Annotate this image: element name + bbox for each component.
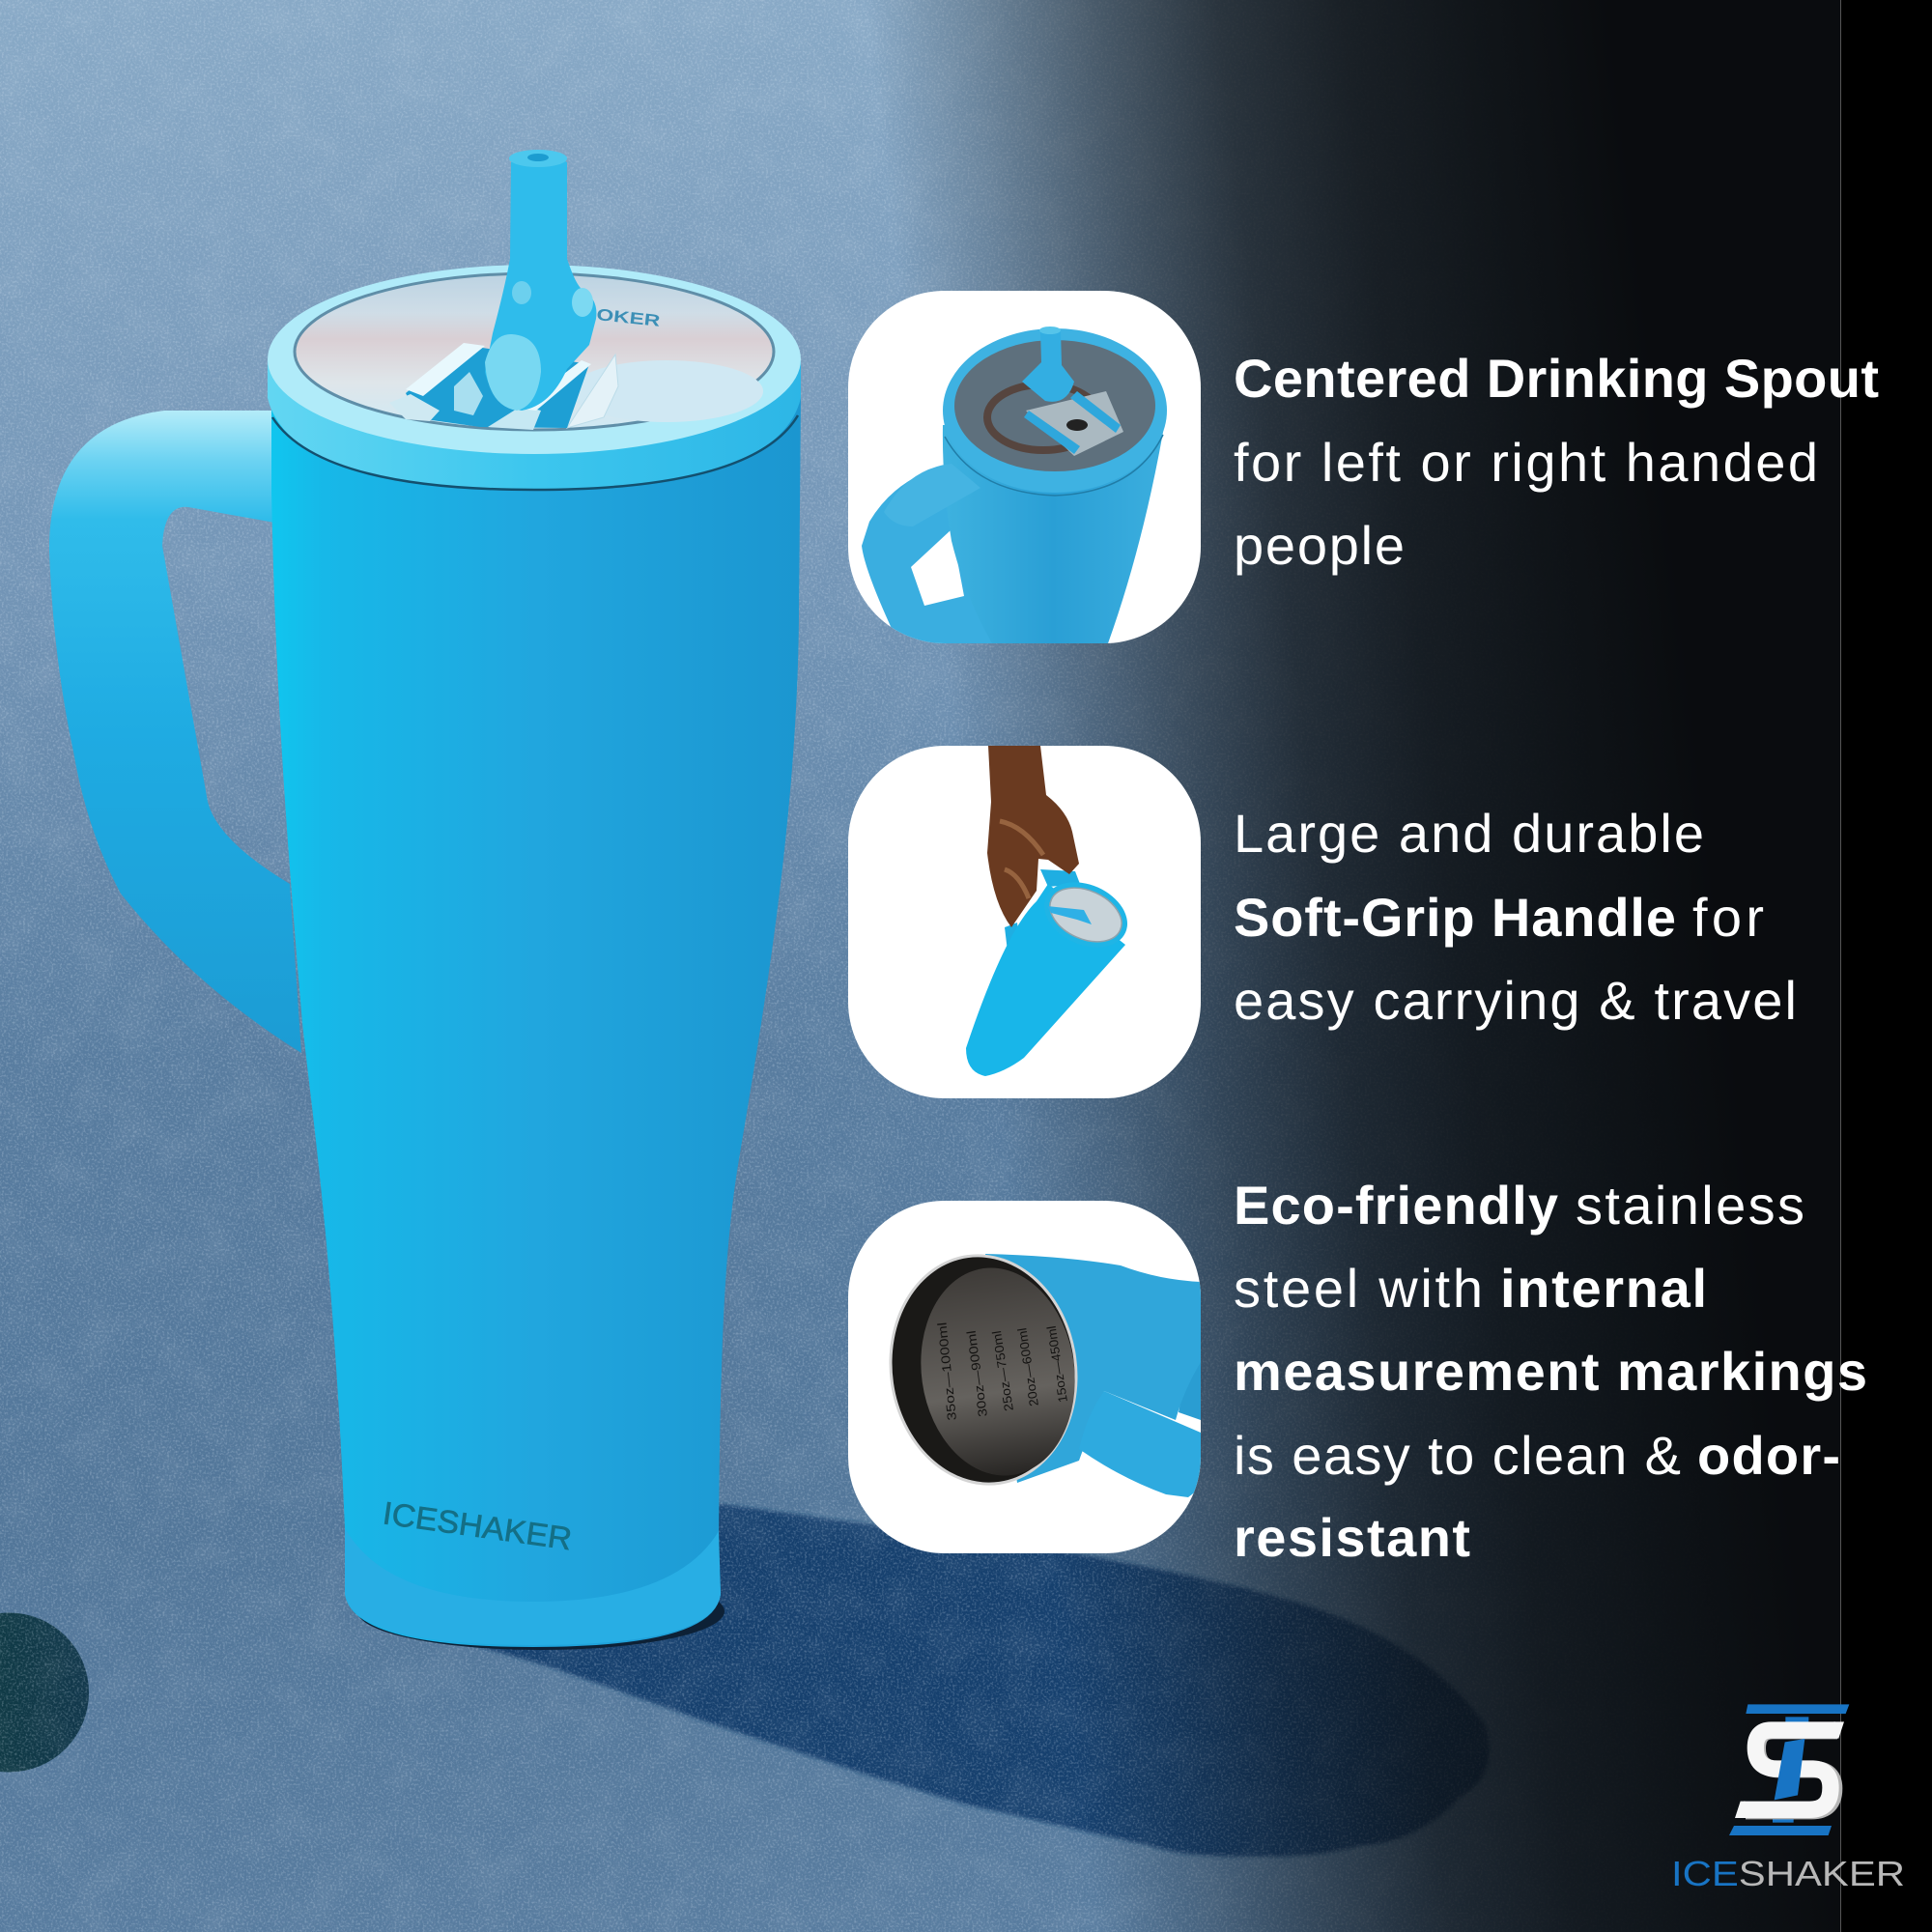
text block: soft-grip handle: easy carrying & travel: [1234, 970, 1797, 1031]
text block: eco-friendly steel: steel with: [1234, 1258, 1483, 1319]
contact shadow: [357, 1573, 724, 1650]
mug rim and lid: [943, 328, 1167, 493]
straw and clear vent: [389, 150, 618, 430]
base ring: [345, 1528, 721, 1645]
text block: eco-friendly steel: [1234, 1175, 1867, 1568]
logo mark: [1729, 1704, 1849, 1835]
logo wordmark: ICE SHAKER: [1671, 1854, 1905, 1893]
lid brand mark: OKER: [596, 305, 661, 330]
text block: eco-friendly steel: internal: [1500, 1258, 1707, 1319]
text block: eco-friendly steel: measurement markings: [1234, 1341, 1867, 1402]
cast shadow of tumbler: [464, 1504, 1490, 1857]
text block: soft-grip handle: [1234, 803, 1797, 1031]
tumbler body: [271, 396, 801, 1647]
text block: soft-grip handle: for: [1692, 887, 1764, 948]
handle: [49, 411, 301, 1053]
text block: centered drinking spout: [1234, 348, 1879, 576]
panel: stainless interior photo: [848, 1201, 1201, 1553]
measurement markings: [934, 1321, 1070, 1421]
panel: soft-grip handle photo: [848, 746, 1201, 1098]
far handle: [1179, 1357, 1201, 1420]
tilted tumbler: [966, 884, 1125, 1076]
text block: centered drinking spout: people: [1234, 515, 1405, 576]
brand on tumbler: ICESHAKER: [381, 1494, 574, 1556]
text block: eco-friendly steel: stainless: [1576, 1175, 1804, 1236]
measurement markings: 25oz—750ml: [989, 1329, 1016, 1412]
text block: eco-friendly steel: odor-: [1697, 1425, 1840, 1486]
text block: soft-grip handle: Soft-Grip Handle: [1234, 887, 1676, 948]
measurement markings: 30oz—900ml: [964, 1329, 990, 1418]
mug opening: [874, 1242, 1093, 1497]
text block: eco-friendly steel: resistant: [1234, 1507, 1470, 1568]
text block: soft-grip handle: Large and durable: [1234, 803, 1704, 864]
mug body: [943, 415, 1166, 643]
text block: eco-friendly steel: is easy to clean &: [1234, 1425, 1681, 1486]
handle: [862, 479, 992, 643]
logo: iceshaker: [1671, 1704, 1905, 1893]
measurement markings: 35oz—1000ml: [934, 1321, 959, 1421]
text block: eco-friendly steel: Eco-friendly: [1234, 1175, 1558, 1236]
lid ring: [268, 265, 801, 490]
rear handle pieces: [1005, 869, 1080, 952]
text block: centered drinking spout: Centered Drinking Spout: [1234, 348, 1879, 409]
hand: [987, 746, 1079, 927]
mug body: [985, 1254, 1201, 1483]
main tumbler: [49, 150, 801, 1650]
handle grip over mug: [884, 464, 980, 526]
measurement markings: 15oz—450ml: [1044, 1324, 1070, 1404]
text block: centered drinking spout: for left or right handed: [1234, 432, 1818, 493]
left edge shadow: [0, 1613, 89, 1772]
measurement markings: 20oz—600ml: [1014, 1326, 1041, 1407]
panel: centered spout photo: [848, 291, 1201, 643]
handle: [1079, 1391, 1201, 1497]
tilted lid: [1053, 883, 1127, 941]
spout: [1022, 330, 1074, 402]
